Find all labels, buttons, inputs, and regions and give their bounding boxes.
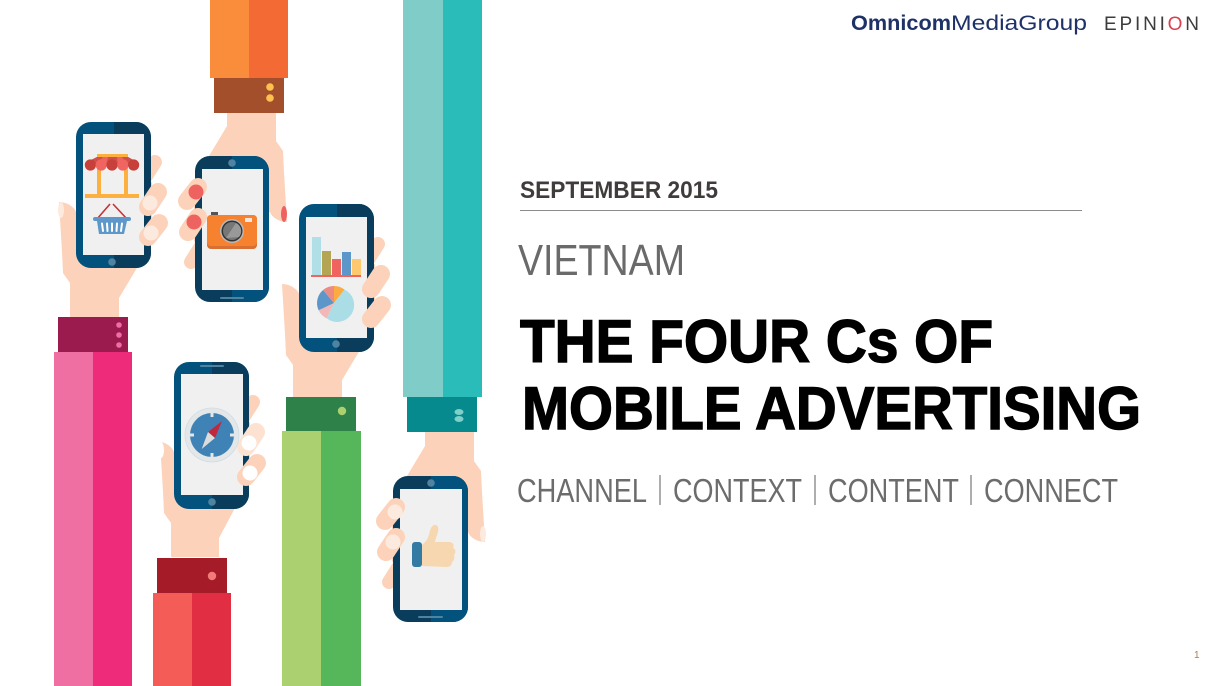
pie chart xyxy=(317,286,354,322)
separators xyxy=(660,475,971,505)
phone xyxy=(76,122,151,268)
teal cuff xyxy=(407,397,477,432)
logo: Omnicom Media Group: MediaGroup xyxy=(951,11,1087,35)
four Cs list xyxy=(517,472,1118,509)
divider xyxy=(520,210,1082,211)
fingers xyxy=(385,504,486,552)
magenta cuff xyxy=(58,317,128,352)
dark green cuff xyxy=(286,397,356,431)
dark red cuff xyxy=(157,558,227,593)
title xyxy=(520,308,1141,442)
hand xyxy=(191,107,287,262)
title line 1: THE FOUR Cs OF xyxy=(520,308,993,375)
hand xyxy=(59,162,155,317)
phone xyxy=(299,204,374,352)
channel: CHANNEL xyxy=(517,472,647,509)
bar chart xyxy=(311,237,361,277)
icon: thumbs up xyxy=(412,525,455,567)
icon: market stall xyxy=(85,154,139,198)
green sleeve xyxy=(282,431,361,686)
icon: shopping basket xyxy=(93,204,131,234)
phone xyxy=(174,362,249,509)
phone xyxy=(393,476,468,622)
fingers with white nails xyxy=(158,432,258,480)
red sleeve xyxy=(153,593,231,686)
orange sleeve xyxy=(210,0,288,78)
hand xyxy=(389,427,485,582)
fingers xyxy=(58,192,159,240)
hand xyxy=(282,244,378,399)
pink sleeve xyxy=(54,352,132,686)
fingers xyxy=(371,274,382,319)
hand xyxy=(160,402,253,557)
logo: Epinion: EPINION xyxy=(1104,14,1199,35)
date: SEPTEMBER 2015 xyxy=(520,177,718,204)
illustration: pink arm holding shopping phone xyxy=(54,122,159,686)
phone xyxy=(195,156,269,302)
context: CONTEXT xyxy=(673,472,802,509)
illustration: green arm holding charts phone xyxy=(282,204,382,686)
logo: Omnicom Media Group xyxy=(851,11,1087,35)
illustration: teal arm holding thumbs-up phone xyxy=(385,0,486,622)
icon: camera xyxy=(207,212,257,249)
logo: Omnicom Media Group: Omnicom xyxy=(851,11,951,35)
page number: 1 xyxy=(1194,650,1200,661)
fingers with red nails xyxy=(186,184,287,232)
country heading: VIETNAM xyxy=(518,236,685,285)
illustration: red arm holding compass phone xyxy=(153,362,258,686)
illustration: orange arm holding camera phone xyxy=(186,0,288,302)
content: CONTENT xyxy=(828,472,959,509)
title line 2: MOBILE ADVERTISING xyxy=(522,375,1141,442)
brown cuff xyxy=(214,78,284,113)
connect: CONNECT xyxy=(984,472,1118,509)
icon: compass xyxy=(185,408,239,462)
teal sleeve xyxy=(403,0,482,397)
